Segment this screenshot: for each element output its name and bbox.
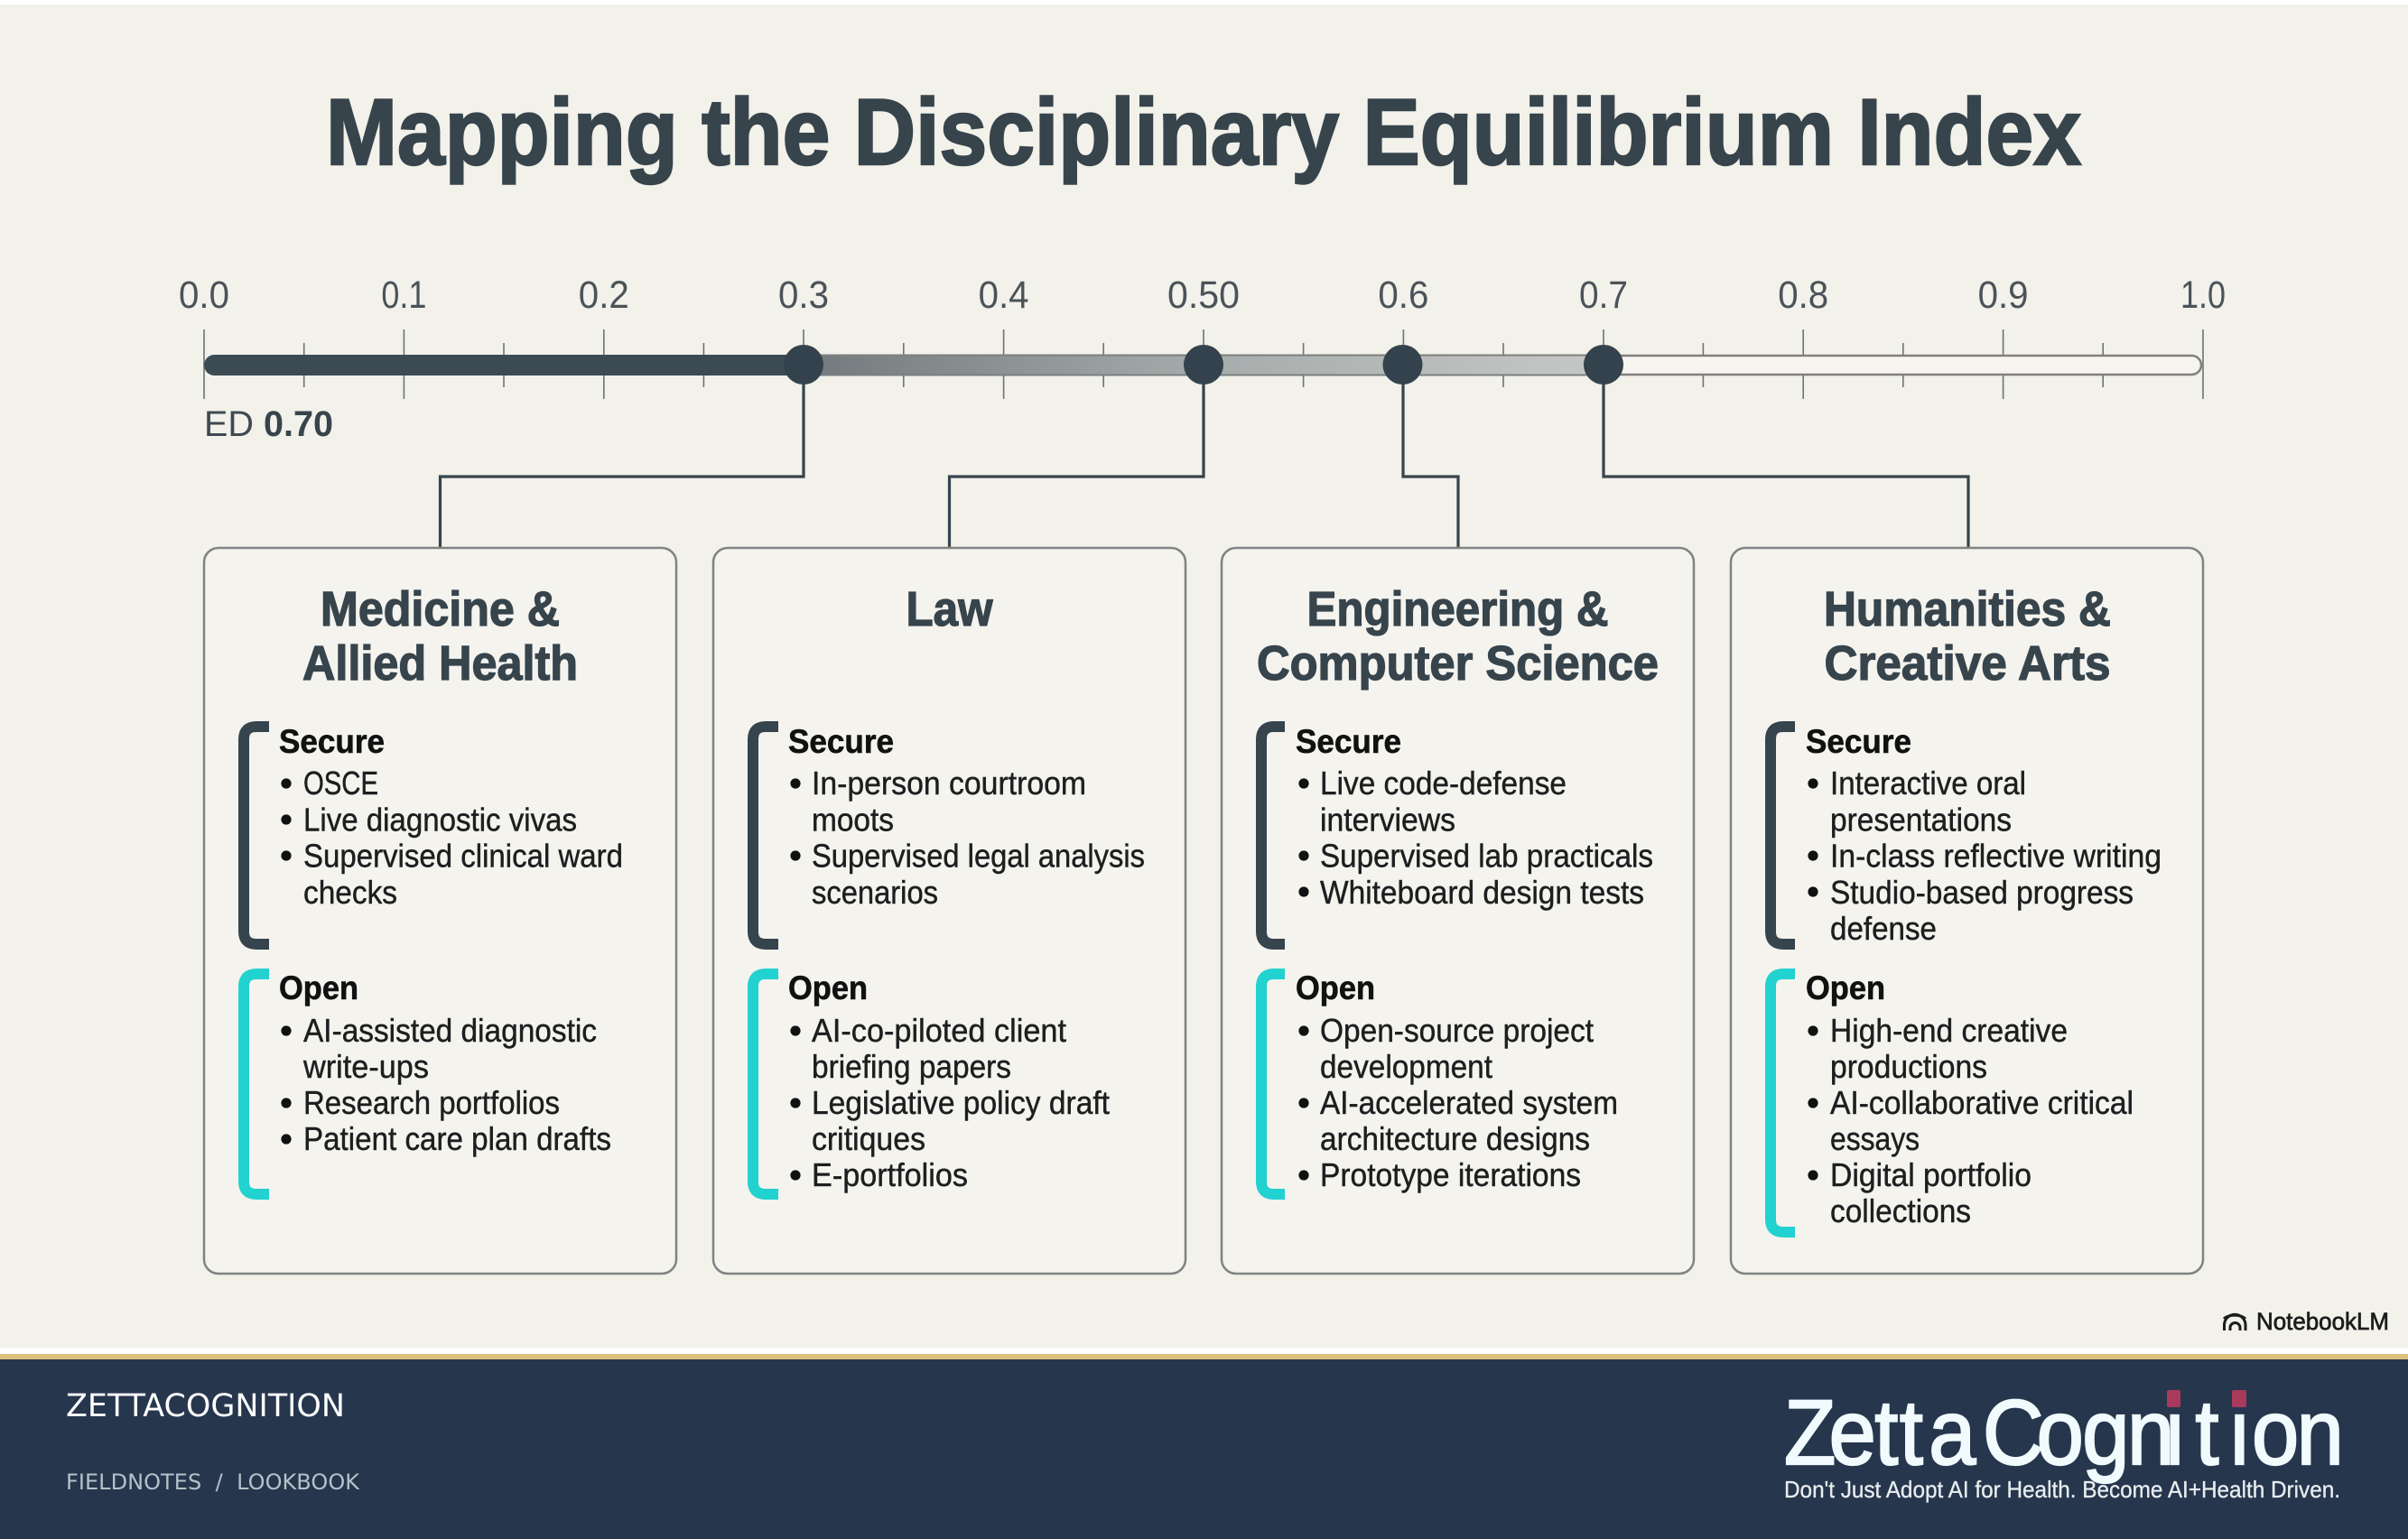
open assessments: briefing papers (812, 1048, 1011, 1085)
open assessments: AI-co-piloted client (812, 1012, 1066, 1049)
open assessments: development (1320, 1048, 1492, 1085)
secure assessments (788, 723, 1145, 911)
open assessments: write-ups (302, 1048, 429, 1085)
axis numeric labels: 0.7 (1579, 273, 1628, 317)
open assessments: Open (1296, 969, 1375, 1006)
card heading: Law (906, 582, 993, 636)
secure assessments: defense (1830, 910, 1937, 947)
open assessments: Research portfolios (303, 1084, 560, 1121)
card heading (302, 582, 578, 691)
logo tagline: Don't Just Adopt AI for Health. Become AI+Health Driven. (1784, 1476, 2340, 1503)
secure assessments: moots (812, 802, 894, 838)
title: Mapping the Disciplinary Equilibrium Index (326, 80, 2081, 185)
panel: Engineering & Computer Science (1222, 548, 1694, 1274)
open assessments: Legislative policy draft (812, 1084, 1110, 1121)
open assessments: Open-source project (1320, 1012, 1594, 1049)
open assessments (1296, 969, 1618, 1193)
open assessments: AI-collaborative critical (1830, 1084, 2134, 1121)
secure assessments: Secure (788, 723, 894, 760)
footer breadcrumb: FIELDNOTES / LOOKBOOK (66, 1469, 360, 1495)
axis numeric labels: 0.9 (1978, 273, 2029, 317)
open bracket (753, 974, 778, 1194)
secure assessments: scenarios (812, 874, 938, 911)
secure assessments: Whiteboard design tests (1320, 874, 1644, 911)
secure bracket (1771, 727, 1795, 944)
card heading: Humanities & (1824, 582, 2111, 636)
secure assessments (279, 723, 623, 911)
axis numeric labels: 0.0 (179, 273, 229, 317)
ED label: ED 0.70 (204, 404, 333, 444)
secure assessments: Secure (1296, 723, 1401, 760)
open bracket (1261, 974, 1285, 1194)
open assessments (279, 969, 611, 1157)
panel: Medicine & Allied Health (204, 548, 676, 1274)
axis numeric labels (179, 273, 2226, 317)
open assessments: Patient care plan drafts (303, 1120, 611, 1157)
secure assessments: In-person courtroom (812, 765, 1086, 802)
open assessments: AI-assisted diagnostic (303, 1012, 597, 1049)
panel: Law (713, 548, 1185, 1274)
secure assessments: Studio-based progress (1830, 874, 2134, 911)
open assessments: Prototype iterations (1320, 1156, 1581, 1193)
logo: ZettaCognition: ZettaCognition (1784, 1380, 2344, 1484)
secure assessments: In-class reflective writing (1830, 838, 2162, 874)
open assessments: collections (1830, 1192, 1971, 1229)
axis numeric labels: 0.4 (979, 273, 1029, 317)
open assessments: AI-accelerated system (1320, 1084, 1618, 1121)
secure assessments: Supervised clinical ward (303, 838, 623, 874)
open bracket (244, 974, 269, 1194)
NotebookLM watermark: NotebookLM (2256, 1308, 2389, 1335)
card heading (1824, 582, 2111, 691)
footer band (0, 1354, 2408, 1539)
secure assessments: Interactive oral (1830, 765, 2026, 802)
secure assessments: Supervised legal analysis (812, 838, 1145, 874)
axis numeric labels: 0.3 (778, 273, 829, 317)
open assessments: productions (1830, 1048, 1987, 1085)
card heading (1257, 582, 1659, 691)
secure bracket (753, 727, 778, 944)
open assessments: critiques (812, 1120, 925, 1157)
axis numeric labels: 0.50 (1167, 273, 1240, 317)
card heading: Engineering & (1307, 582, 1609, 636)
card heading: Allied Health (302, 636, 578, 691)
open assessments: E-portfolios (812, 1156, 968, 1193)
open assessments: essays (1830, 1120, 1920, 1157)
open assessments: Open (1806, 969, 1885, 1006)
open assessments: Digital portfolio (1830, 1156, 2031, 1193)
secure assessments: checks (303, 874, 397, 911)
axis numeric labels: 1.0 (2180, 273, 2226, 317)
secure bracket (1261, 727, 1285, 944)
scale axis (179, 273, 2226, 548)
open assessments: architecture designs (1320, 1120, 1590, 1157)
secure assessments: Secure (1806, 723, 1911, 760)
axis numeric labels: 0.2 (579, 273, 629, 317)
axis numeric labels: 0.1 (381, 273, 426, 317)
secure assessments (1296, 723, 1653, 911)
marker dots (784, 345, 1623, 385)
icon: NotebookLM arcs (2224, 1314, 2245, 1330)
card heading: Creative Arts (1824, 636, 2111, 691)
connector lines (441, 365, 1968, 548)
secure assessments: Secure (279, 723, 385, 760)
secure assessments: presentations (1830, 802, 2012, 838)
footer brand name: ZETTACOGNITION (66, 1388, 345, 1424)
secure assessments: interviews (1320, 802, 1455, 838)
open assessments: Open (279, 969, 358, 1006)
secure assessments (1806, 723, 2162, 947)
secure assessments: Live diagnostic vivas (303, 802, 577, 838)
open assessments (788, 969, 1110, 1193)
card heading: Computer Science (1257, 636, 1659, 691)
secure assessments: OSCE (303, 765, 378, 802)
open assessments: High-end creative (1830, 1012, 2068, 1049)
card heading: Medicine & (321, 582, 560, 636)
secure assessments: Live code-defense (1320, 765, 1567, 802)
scale bar (204, 355, 2201, 375)
open bracket (1771, 974, 1795, 1232)
axis numeric labels: 0.8 (1778, 273, 1828, 317)
secure bracket (244, 727, 269, 944)
secure assessments: Supervised lab practicals (1320, 838, 1653, 874)
axis numeric labels: 0.6 (1378, 273, 1428, 317)
open assessments: Open (788, 969, 868, 1006)
panel: Humanities & Creative Arts (1731, 548, 2203, 1274)
open assessments (1806, 969, 2134, 1229)
